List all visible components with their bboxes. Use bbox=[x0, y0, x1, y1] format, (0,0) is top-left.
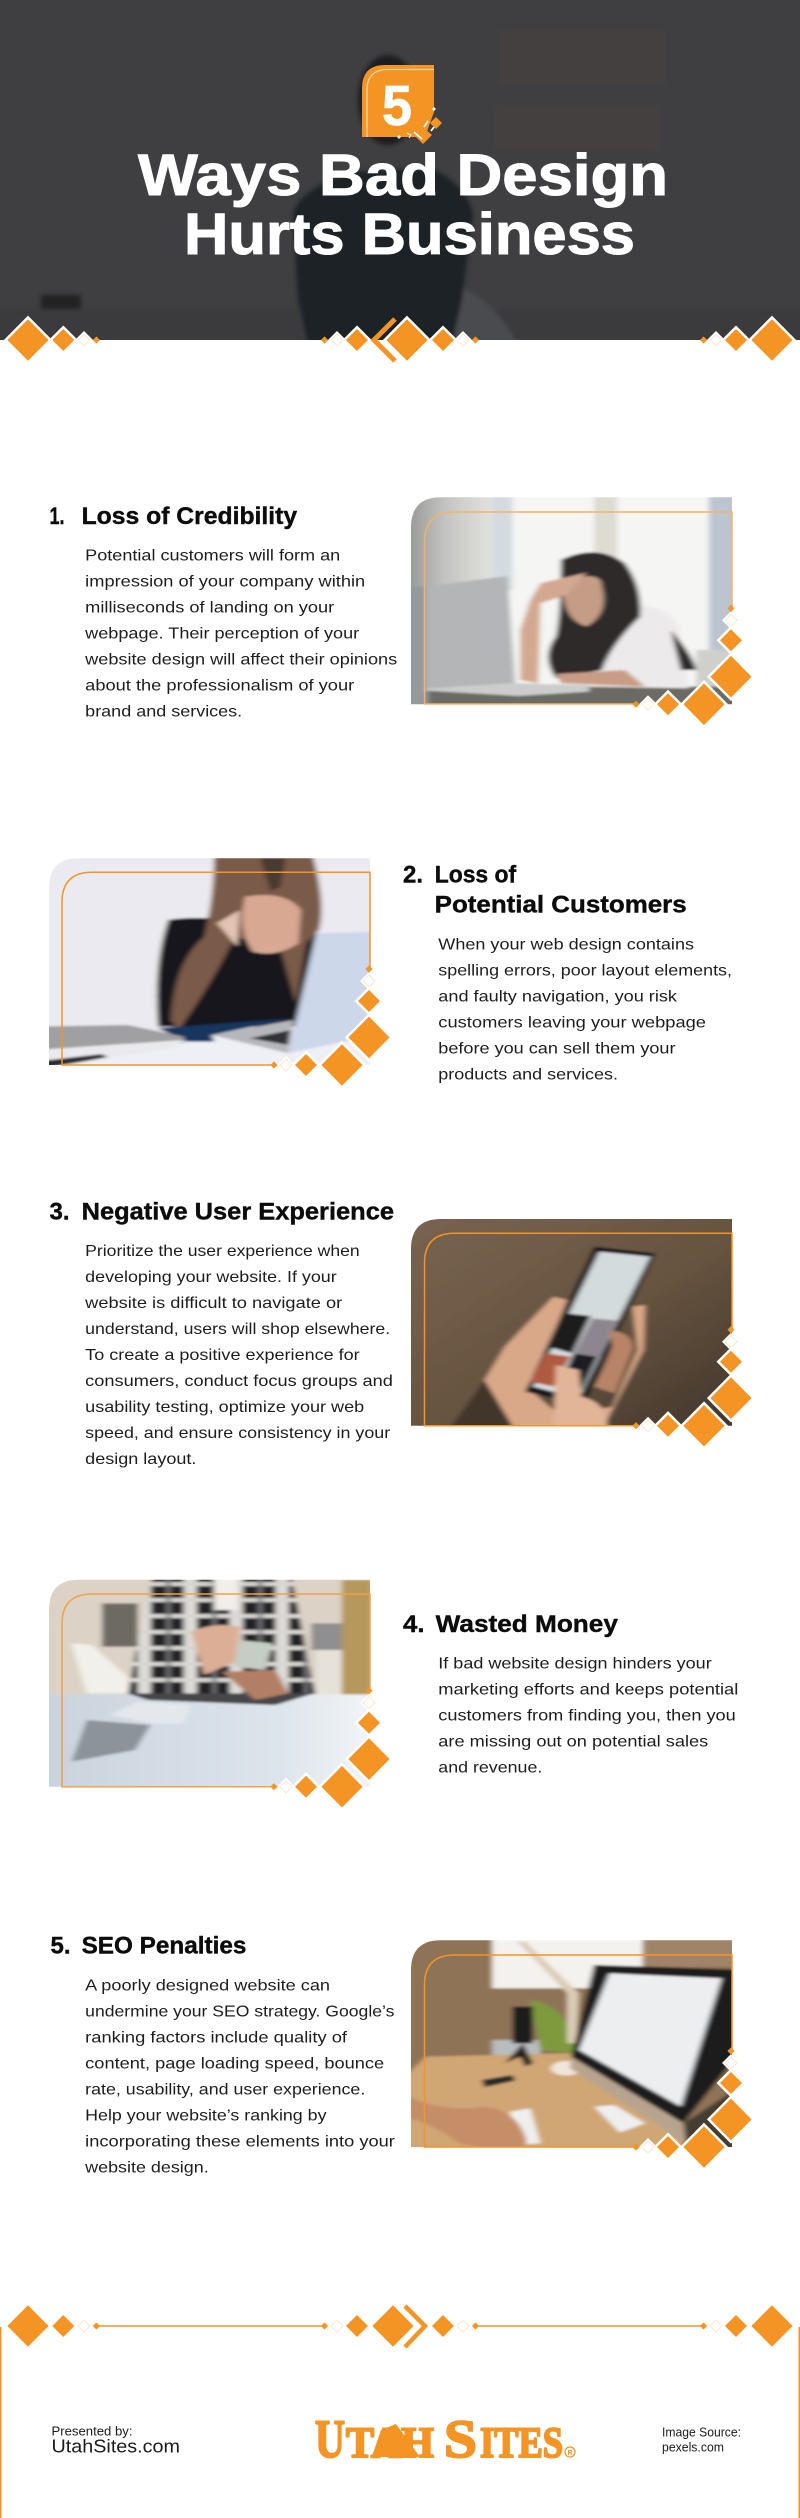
image source: pexels.com bbox=[662, 2441, 724, 2455]
heading: Loss of Credibility bbox=[82, 503, 298, 530]
heading: Wasted Money bbox=[436, 1611, 619, 1638]
logo: Utah Sites: S bbox=[444, 2409, 477, 2469]
body text bbox=[84, 548, 397, 721]
body text: content, page loading speed, bounce bbox=[85, 2056, 384, 2073]
title: Hurts Business bbox=[184, 202, 635, 267]
section 2: loss of potential customers bbox=[36, 850, 732, 1086]
photo: desk with iMac bbox=[411, 1940, 732, 2147]
header photo: man at whiteboard bbox=[0, 0, 800, 350]
header diamond divider bbox=[7, 319, 793, 361]
body text bbox=[84, 1978, 396, 2177]
logo: Utah Sites: R bbox=[568, 2450, 573, 2457]
number badge bbox=[362, 65, 442, 144]
footer side rules bbox=[1, 2327, 799, 2518]
image source: Image Source: bbox=[662, 2426, 741, 2440]
body text: brand and services. bbox=[85, 704, 242, 721]
diamond cluster bbox=[270, 965, 390, 1086]
body text: milliseconds of landing on your bbox=[85, 600, 335, 617]
body text: are missing out on potential sales bbox=[438, 1734, 708, 1751]
photo frame bbox=[424, 1233, 732, 1426]
heading: 2. bbox=[403, 861, 423, 888]
body text: marketing efforts and keeps potential bbox=[438, 1682, 738, 1699]
body text: speed, and ensure consistency in your bbox=[85, 1425, 391, 1442]
body text: incorporating these elements into your bbox=[85, 2134, 396, 2151]
logo: Utah Sites bbox=[315, 2409, 575, 2469]
body text: When your web design contains bbox=[438, 937, 694, 954]
logo: Utah Sites: ITES bbox=[480, 2420, 563, 2467]
heading: Potential Customers bbox=[435, 892, 687, 919]
section 3: negative user experience bbox=[50, 1198, 752, 1468]
body text: about the professionalism of your bbox=[85, 678, 355, 695]
presented by: UtahSites.com bbox=[52, 2436, 180, 2456]
diamond cluster bbox=[632, 605, 752, 725]
photo: woman counting cash bbox=[49, 1580, 370, 1787]
body text: rate, usability, and user experience. bbox=[85, 2082, 365, 2099]
number badge: 5 bbox=[382, 74, 412, 138]
body text: before you can sell them your bbox=[438, 1041, 676, 1058]
photo: frustrated woman at laptop bbox=[411, 497, 732, 704]
section 1: loss of credibility bbox=[50, 490, 752, 725]
heading: 1. bbox=[50, 503, 64, 530]
heading: 5. bbox=[50, 1933, 70, 1960]
body text bbox=[438, 1656, 738, 1777]
body text: consumers, conduct focus groups and bbox=[85, 1373, 393, 1390]
photo frame bbox=[62, 872, 370, 1065]
body text: ranking factors include quality of bbox=[85, 2030, 348, 2047]
body text: undermine your SEO strategy. Google’s bbox=[85, 2004, 394, 2021]
body text: spelling errors, poor layout elements, bbox=[438, 963, 732, 980]
body text: customers leaving your webpage bbox=[438, 1015, 706, 1032]
image source bbox=[662, 2426, 741, 2455]
logo: Utah Sites: U bbox=[315, 2409, 345, 2469]
logo: Utah Sites: TAH bbox=[346, 2420, 434, 2467]
body text bbox=[84, 1243, 393, 1468]
photo: hands holding smartphone bbox=[411, 1219, 732, 1426]
body text: A poorly designed website can bbox=[85, 1978, 330, 1995]
body text bbox=[438, 937, 732, 1084]
body text: Prioritize the user experience when bbox=[85, 1243, 360, 1260]
footer diamond divider bbox=[7, 2305, 793, 2347]
section 4: wasted money bbox=[36, 1570, 738, 1808]
body text: customers from finding you, then you bbox=[438, 1708, 736, 1725]
body text: To create a positive experience for bbox=[85, 1347, 360, 1364]
diamond cluster bbox=[270, 1687, 390, 1808]
body text: products and services. bbox=[438, 1067, 618, 1084]
title: Ways Bad Design bbox=[138, 143, 668, 208]
heading: 3. bbox=[50, 1198, 70, 1225]
body text: and revenue. bbox=[438, 1760, 542, 1777]
presented by: Presented by: bbox=[52, 2425, 132, 2439]
body text: usability testing, optimize your web bbox=[85, 1399, 364, 1416]
body text: website design. bbox=[84, 2160, 209, 2177]
body text: impression of your company within bbox=[85, 574, 365, 591]
heading bbox=[403, 861, 687, 919]
diamond cluster bbox=[632, 2047, 752, 2168]
body text: webpage. Their perception of your bbox=[84, 626, 360, 643]
photo: stressed woman with laptop bbox=[49, 858, 370, 1065]
presented by bbox=[52, 2425, 180, 2456]
header banner bbox=[0, 0, 800, 350]
heading: 4. bbox=[403, 1611, 424, 1638]
body text: Potential customers will form an bbox=[85, 548, 340, 565]
body text: Help your website’s ranking by bbox=[85, 2108, 326, 2125]
body text: understand, users will shop elsewhere. bbox=[85, 1321, 390, 1338]
body text: If bad website design hinders your bbox=[438, 1656, 712, 1673]
body text: website design will affect their opinions bbox=[84, 652, 397, 669]
photo frame bbox=[424, 512, 732, 704]
title bbox=[138, 143, 668, 267]
body text: design layout. bbox=[85, 1451, 196, 1468]
photo frame bbox=[424, 1955, 732, 2147]
diamond cluster bbox=[632, 1326, 752, 1446]
body text: and faulty navigation, you risk bbox=[438, 989, 678, 1006]
footer panel bbox=[1, 2305, 799, 2518]
body text: developing your website. If your bbox=[85, 1269, 337, 1286]
heading: SEO Penalties bbox=[82, 1933, 246, 1960]
section 5: seo penalties bbox=[50, 1930, 752, 2177]
photo frame bbox=[62, 1594, 370, 1787]
heading: Loss of bbox=[435, 861, 517, 888]
heading: Negative User Experience bbox=[82, 1198, 394, 1225]
body text: website is difficult to navigate or bbox=[84, 1295, 343, 1312]
